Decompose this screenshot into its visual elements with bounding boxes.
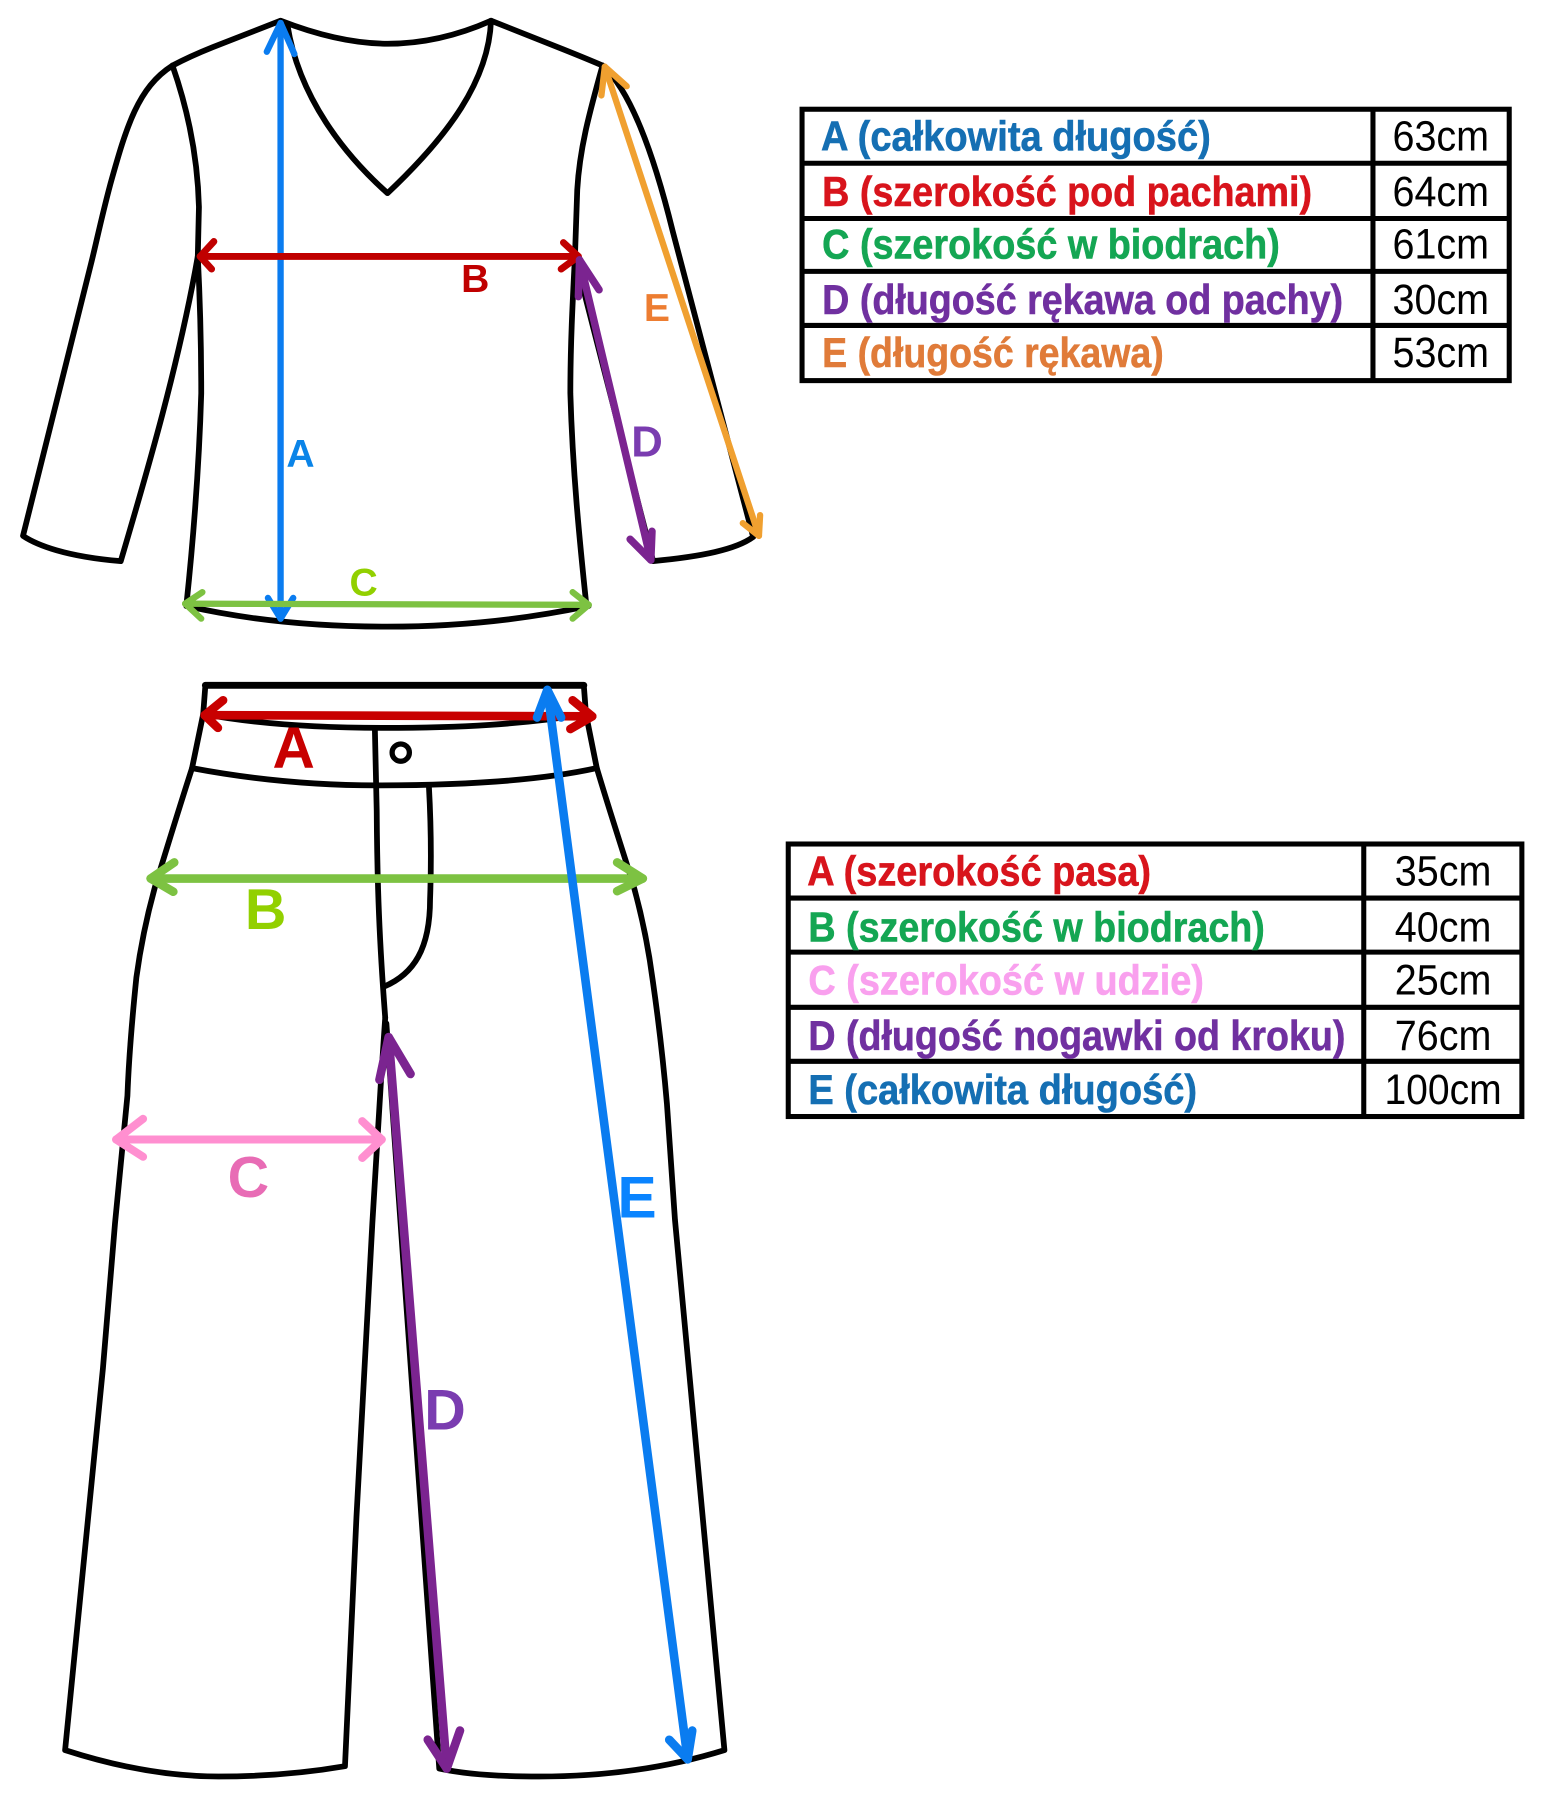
- label C: C: [350, 562, 378, 605]
- arrow D: inseam length: [379, 1037, 460, 1769]
- row D: 76cm: [1395, 1012, 1491, 1060]
- row D: D (długość nogawki od kroku): [808, 1013, 1345, 1059]
- row B: 64cm: [1393, 168, 1489, 216]
- row D: 30cm: [1393, 276, 1489, 324]
- label D: D: [424, 1378, 466, 1442]
- table: top garment measurements: [802, 109, 1509, 381]
- row A: [821, 113, 1489, 161]
- row C: C (szerokość w biodrach): [822, 222, 1280, 268]
- row C: [808, 957, 1491, 1005]
- row E: 53cm: [1393, 329, 1489, 377]
- table grid: [788, 844, 1522, 1117]
- row C: 25cm: [1395, 957, 1491, 1005]
- panel: top garment diagram: [23, 21, 760, 627]
- arrow C: thigh width: [116, 1119, 382, 1158]
- row E: E (całkowita długość): [808, 1067, 1197, 1113]
- icon: button: [392, 744, 409, 761]
- label E: E: [617, 1166, 657, 1231]
- arrow A: waist width: [205, 700, 592, 729]
- row D: D (długość rękawa od pachy): [822, 277, 1343, 323]
- label C: C: [228, 1146, 269, 1210]
- arrow D: sleeve length from armpit: [578, 260, 652, 560]
- trousers outline: [65, 685, 724, 1777]
- label E: E: [644, 287, 670, 330]
- arrow E: sleeve length: [601, 67, 760, 536]
- arrow A: total length: [267, 23, 294, 619]
- row C: 61cm: [1393, 221, 1489, 269]
- row E: 100cm: [1384, 1066, 1502, 1114]
- row A: A (szerokość pasa): [807, 848, 1151, 894]
- sweater outline: [23, 21, 753, 627]
- arrow E: total length: [537, 690, 692, 1759]
- row E: [808, 1066, 1502, 1114]
- row E: [822, 329, 1489, 377]
- row A: A (całkowita długość): [821, 114, 1211, 160]
- row B: B (szerokość pod pachami): [822, 169, 1312, 215]
- arrow B: width under arms: [200, 241, 578, 269]
- row B: 40cm: [1395, 904, 1491, 952]
- arrow C: hip width: [185, 592, 589, 619]
- row A: [807, 847, 1491, 895]
- row A: 63cm: [1393, 113, 1489, 161]
- label A: A: [273, 716, 315, 781]
- label A: A: [286, 433, 315, 476]
- row C: C (szerokość w udzie): [808, 958, 1204, 1004]
- arrow B: hip width: [151, 862, 643, 892]
- label B: B: [461, 258, 489, 301]
- label D: D: [631, 417, 663, 466]
- table: bottom garment measurements: [788, 844, 1522, 1117]
- row E: E (długość rękawa): [822, 330, 1164, 376]
- row B: B (szerokość w biodrach): [808, 905, 1265, 951]
- panel: bottom garment diagram: [65, 685, 724, 1777]
- label B: B: [245, 878, 286, 942]
- row A: 35cm: [1395, 847, 1491, 895]
- table grid: [802, 109, 1509, 381]
